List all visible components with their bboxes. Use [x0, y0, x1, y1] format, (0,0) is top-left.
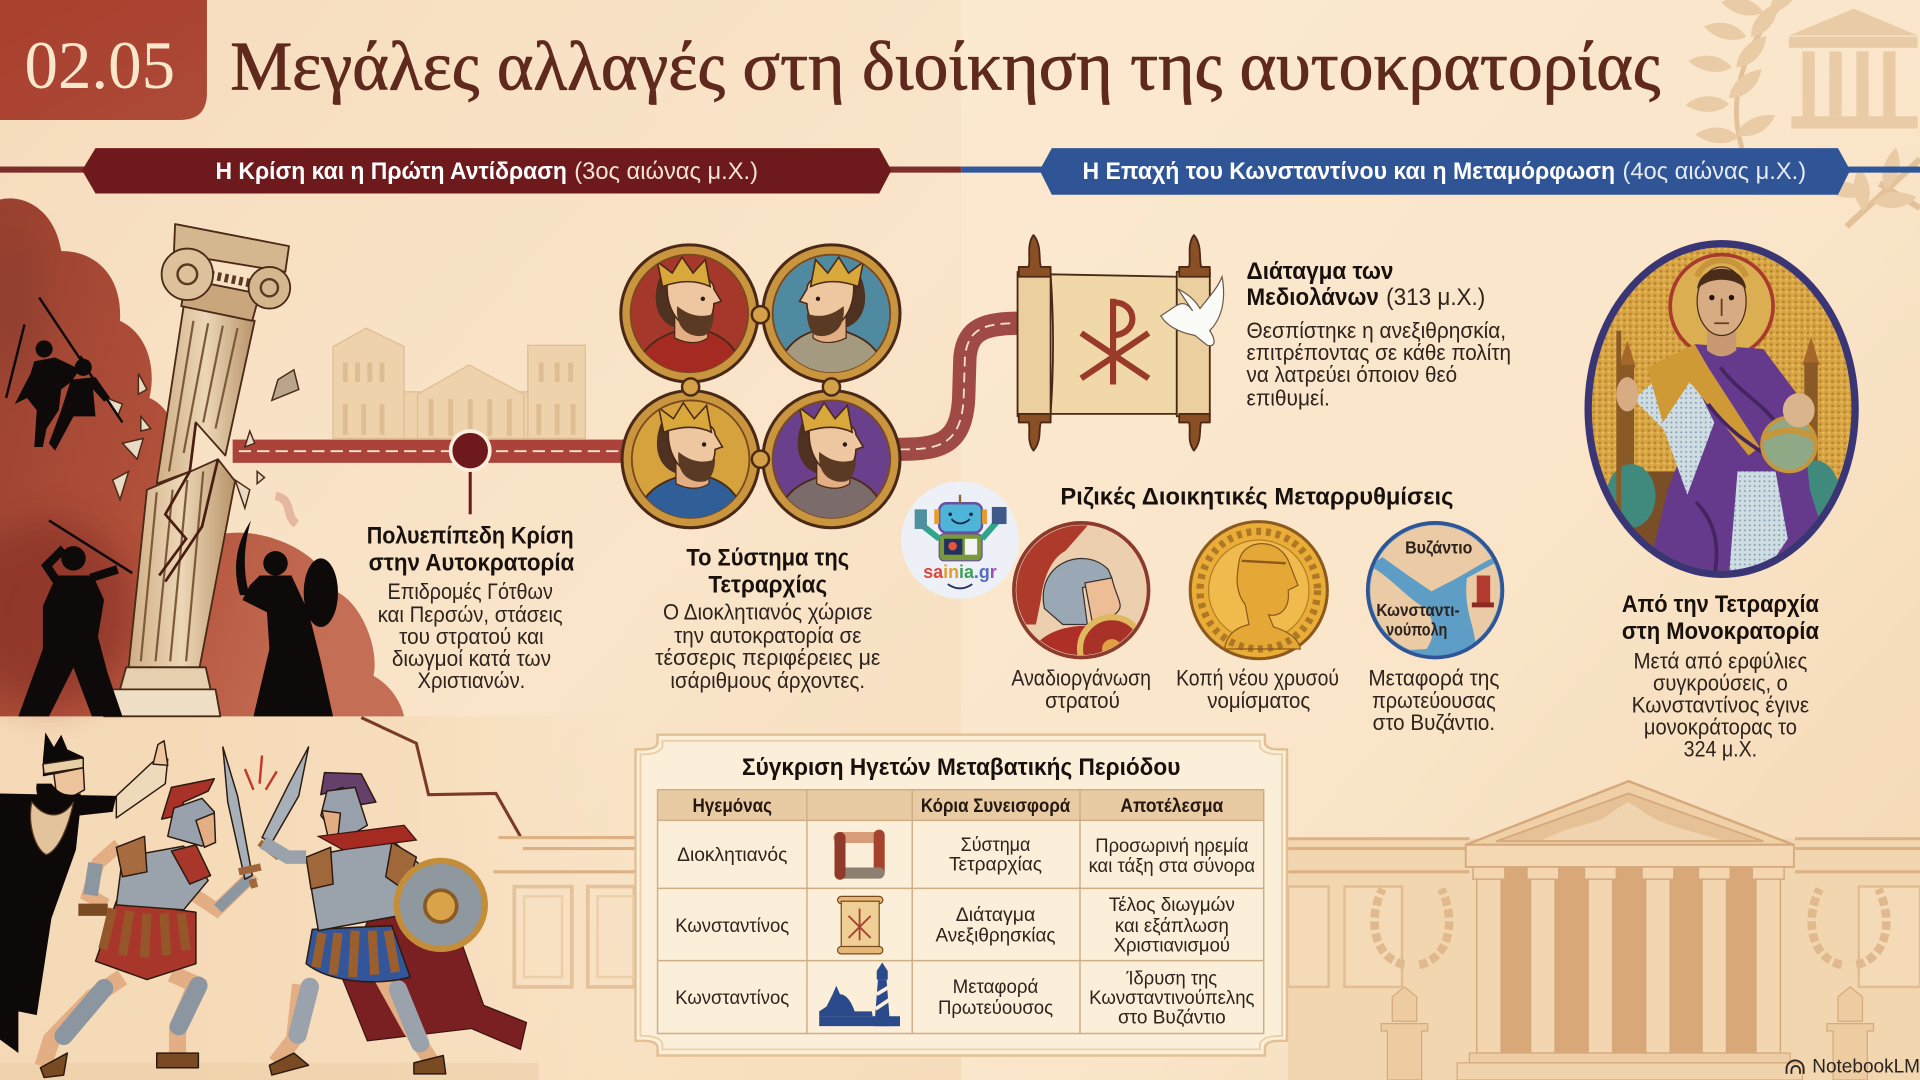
table header: Ηγεμόνας: [692, 795, 772, 817]
timeline road to edict: [894, 323, 1021, 449]
bottom-left scene: crossed swords: [223, 747, 309, 888]
banner: Constantine period: (4ος αιώνας μ.Χ.): [1622, 158, 1806, 185]
broken column: [104, 224, 290, 716]
reform captions: Κοπή νέου χρυσού: [1176, 666, 1339, 691]
reforms heading: Ριζικές Διοικητικές Μεταρρυθμίσεις: [1060, 483, 1453, 510]
edict text block: να λατρεύει όποιον θεό: [1247, 362, 1457, 387]
row: Constantine edict: Ανεξιθρησκίας: [936, 925, 1056, 947]
faint temple skyline: [333, 328, 585, 438]
reform captions: [1011, 666, 1499, 735]
transition text block: Μετά από ερφύλιες: [1633, 649, 1807, 674]
row: Constantine capital: Πρωτεύουσος: [938, 997, 1053, 1019]
row: Diocletian: Τετραρχίας: [949, 854, 1042, 876]
bottom-left scene: priest figure: [0, 732, 168, 1053]
table header: Κόρια Συνεισφορά: [921, 795, 1070, 817]
row: Constantine edict: Τέλος διωγμών: [1109, 894, 1235, 916]
table grid: [658, 790, 1264, 1033]
reform captions: Αναδιοργάνωση: [1011, 666, 1151, 691]
timeline marker crisis: [451, 431, 490, 514]
reform icon: gold coin: [1190, 522, 1327, 659]
crisis text block: Χριστιανών.: [418, 668, 525, 693]
reform icon: map of Byzantium: νούπολη: [1386, 620, 1447, 640]
crisis text block: του στρατού και: [399, 624, 544, 649]
banner: crisis period: [0, 148, 961, 193]
row: Diocletian: Σύστημα: [961, 834, 1030, 856]
transition text block: Κωνσταντίνος έγινε: [1632, 693, 1809, 718]
edict text block: (313 μ.Χ.): [1386, 284, 1485, 311]
row: Constantine capital: Ίδρυση της: [1126, 967, 1217, 989]
reform icon: map of Byzantium: Κωνσταντι-: [1376, 600, 1460, 620]
banner: Constantine period: [961, 148, 1920, 195]
row: Constantine edict: Κωνσταντίνος: [675, 915, 789, 937]
edict text block: επιτρέποντας σε κάθε πολίτη: [1247, 340, 1511, 365]
reform captions: στρατού: [1045, 688, 1120, 713]
tetrarchy medallions: [621, 245, 900, 528]
comparison table panel: [636, 735, 1287, 1056]
icon: city and lighthouse: [819, 962, 900, 1026]
transition text block: 324 μ.Χ.: [1684, 737, 1757, 762]
reform icon: map of Byzantium: [1368, 520, 1504, 658]
table title: Σύγκριση Ηγετών Μεταβατικής Περιόδου: [742, 754, 1180, 781]
edict text block: Μεδιολάνων: [1247, 284, 1379, 311]
NotebookLM mark: NotebookLM: [1812, 1057, 1920, 1078]
reform captions: νομίσματος: [1207, 688, 1310, 713]
table header: Αποτέλεσμα: [1120, 795, 1223, 817]
row: Constantine edict: Χριστιανισμού: [1114, 934, 1230, 956]
transition text block: συγκρούσεις, ο: [1653, 671, 1788, 696]
crisis text block: [367, 523, 574, 693]
reform captions: Μεταφορά της: [1368, 666, 1499, 691]
row: Constantine capital: στο Βυζάντιο: [1118, 1007, 1226, 1029]
decorative temple bottom right: [1288, 781, 1920, 1080]
edict text block: Διάταγμα των: [1247, 258, 1393, 285]
Constantine mosaic portrait: [1584, 240, 1859, 578]
logo: sainia.gr robot: sainia.gr: [923, 561, 997, 582]
transition text block: [1622, 591, 1819, 762]
transition text block: μονοκράτορας το: [1644, 715, 1797, 740]
crisis text block: στην Αυτοκρατορία: [369, 550, 574, 577]
row: Diocletian: Διοκλητιανός: [677, 844, 787, 866]
row: Diocletian: και τάξη στα σύνορα: [1089, 855, 1255, 877]
reform captions: πρωτεύουσας: [1372, 688, 1496, 713]
tetrarchy text block: την αυτοκρατορία σε: [674, 623, 862, 648]
row: Diocletian: [677, 834, 1255, 877]
crisis text block: Επιδρομές Γότθων: [388, 579, 553, 604]
row: Constantine edict: Διάταγμα: [956, 904, 1035, 926]
banner: crisis period: (3ος αιώνας μ.Χ.): [574, 158, 758, 185]
banner: crisis period: Η Κρίση και η Πρώτη Αντίδραση: [216, 158, 567, 185]
tetrarchy text block: ισάριθμους άρχοντες.: [670, 668, 865, 693]
title badge: [0, 0, 207, 120]
title badge: 02.05: [24, 28, 175, 103]
icon: small scroll: [838, 896, 883, 954]
banner: Constantine period: Η Επαχή του Κωνσταντίνου και η Μεταμόρφωση: [1082, 158, 1615, 185]
icon: joined hands: [839, 835, 879, 874]
crisis text block: διωγμοί κατά των: [392, 646, 551, 671]
reform captions: στο Βυζάντιο.: [1373, 710, 1495, 735]
edict text block: [1247, 258, 1511, 410]
transition text block: Από την Τετραρχία: [1622, 591, 1819, 618]
row: Constantine capital: Κωνσταντίνος: [675, 987, 789, 1009]
row: Constantine capital: Κωνσταντινούπελης: [1089, 987, 1254, 1009]
row: Constantine edict: [675, 894, 1235, 956]
silhouettes of invaders on the cloud: [6, 298, 338, 716]
row: Constantine capital: Μεταφορά: [953, 976, 1038, 998]
tetrarchy text block: Ο Διοκλητιανός χώρισε: [663, 600, 873, 625]
bottom-left scene: second soldier: [263, 773, 527, 1075]
reform icon: soldier: [1012, 521, 1150, 660]
edict text block: επιθυμεί.: [1247, 385, 1330, 410]
scroll with chi-rho: [1018, 235, 1224, 451]
reform icon: map of Byzantium: Βυζάντιο: [1405, 537, 1472, 557]
tetrarchy text block: τέσσερις περιφέρειες με: [655, 645, 881, 670]
transition text block: στη Μονοκρατορία: [1622, 618, 1819, 645]
row: Diocletian: Προσωρινή ηρεμία: [1095, 835, 1248, 857]
row: Constantine capital: [675, 962, 1254, 1029]
title: Μεγάλες αλλαγές στη διοίκηση της αυτοκρατορίας: [230, 28, 1660, 105]
edict text block: Θεσπίστηκε η ανεξιθρησκία,: [1247, 318, 1506, 343]
crisis text block: Πολυεπίπεδη Κρίση: [367, 523, 574, 550]
tetrarchy text block: Το Σύστημα της: [686, 545, 849, 572]
falling stone fragments: [107, 370, 299, 508]
crisis text block: και Περσών, στάσεις: [378, 602, 563, 627]
red smoke cloud: [0, 198, 637, 987]
timeline road left: [233, 440, 624, 463]
decorative laurel and temple top right: [1685, 0, 1920, 227]
logo: sainia.gr robot: [901, 481, 1019, 599]
row: Constantine edict: και εξάπλωση: [1115, 915, 1229, 937]
tetrarchy text block: Τετραρχίας: [708, 572, 827, 599]
tetrarchy text block: [655, 545, 881, 693]
bottom-left scene: first soldier: [40, 779, 253, 1078]
table header: [692, 795, 1223, 817]
